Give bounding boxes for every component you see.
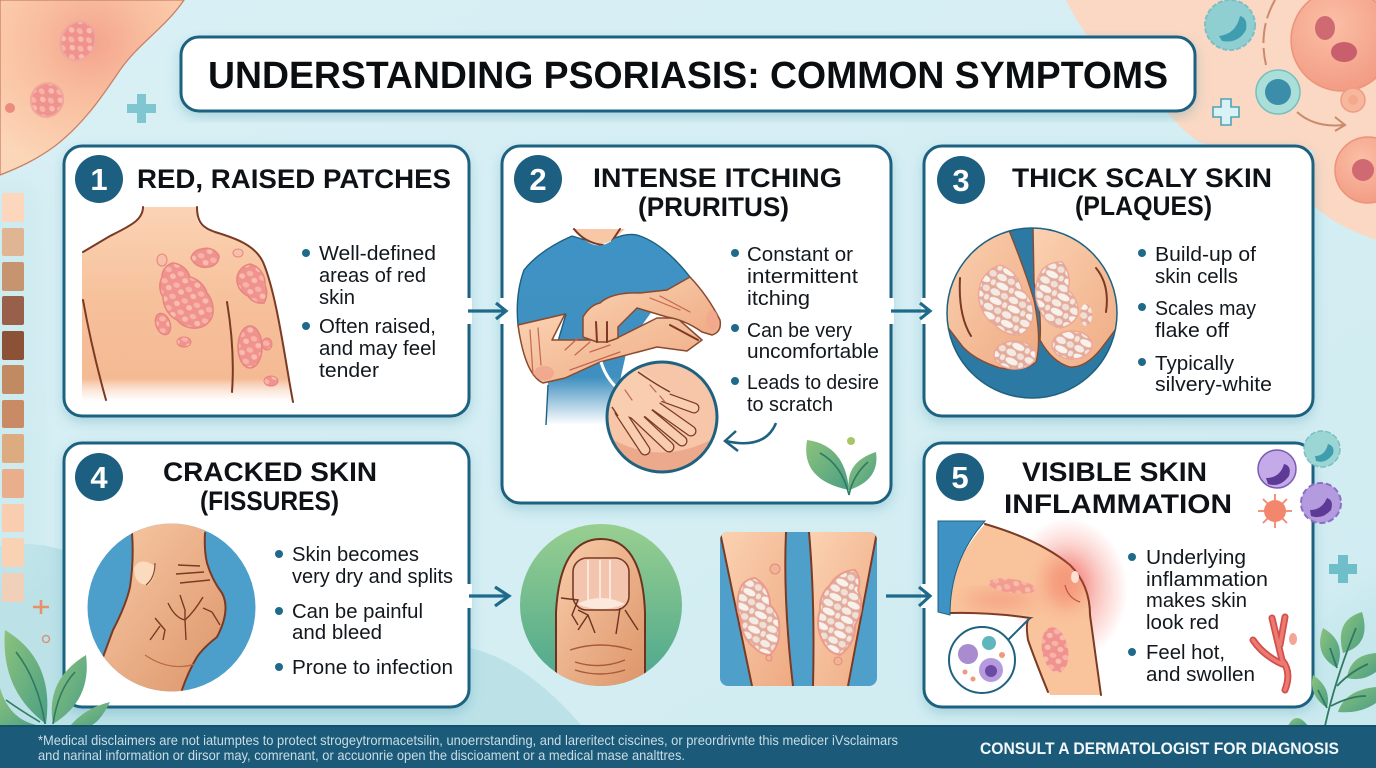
heading 3: THICK SCALY SKIN	[1012, 163, 1272, 193]
icon: purple spiky cell	[1301, 483, 1341, 523]
icon: teal cell	[1304, 431, 1340, 467]
decorative skin cells, top right	[1066, 0, 1376, 240]
bullets 1: skin	[319, 286, 355, 309]
number badge 5	[936, 453, 984, 501]
heading 2: (PRURITUS)	[638, 192, 789, 222]
number badge 5: 5	[951, 460, 969, 495]
illustration: cracked heel	[88, 520, 256, 695]
bullets 5	[1128, 546, 1268, 686]
bullets 3: skin cells	[1155, 265, 1238, 288]
heading 2: INTENSE ITCHING	[593, 163, 842, 193]
heading 3	[1012, 163, 1272, 221]
bullets 3: Build-up of	[1155, 243, 1256, 266]
bullets 4	[275, 543, 453, 679]
title: UNDERSTANDING PSORIASIS: COMMON SYMPTOMS	[208, 55, 1168, 97]
bullets 3: Typically	[1155, 352, 1235, 375]
number badge 4: 4	[90, 460, 108, 495]
bullets 1: areas of red	[319, 264, 426, 287]
heading 5	[1004, 457, 1232, 519]
heading 2	[593, 163, 842, 222]
heading 5: INFLAMMATION	[1004, 489, 1232, 519]
panel 5: visible skin inflammation	[924, 431, 1341, 707]
bullets 2: Constant or	[747, 243, 853, 266]
bullets 4: very dry and splits	[292, 565, 453, 588]
bullets 1: tender	[319, 359, 379, 382]
medical disclaimer text: and narinal information or dirsor may, comrenant, or accuonrie open the discioament or a medical mase analttres.	[38, 747, 685, 763]
icon: virus	[1258, 494, 1292, 528]
bullets 4: and bleed	[292, 621, 382, 644]
number badge 1	[75, 155, 123, 203]
heading 3: (PLAQUES)	[1075, 191, 1212, 221]
bullets 4: Can be painful	[292, 600, 423, 623]
bullets 2: Can be very	[747, 319, 853, 342]
bullets 4: Prone to infection	[292, 656, 453, 679]
skin tone swatches	[2, 193, 24, 602]
bullets 3: silvery-white	[1155, 373, 1272, 396]
icon: leaf sprout	[806, 437, 876, 495]
magnified hand inset	[605, 362, 720, 480]
bullets 5: Underlying	[1146, 546, 1246, 569]
illustration: back with patches	[82, 207, 293, 402]
arrow: panel 4 to nail	[466, 584, 509, 608]
decorative plus, top left	[127, 94, 156, 123]
bullets 4: Skin becomes	[292, 543, 419, 566]
legs illustration	[720, 532, 877, 686]
decorative outlined plus, top right	[1213, 99, 1239, 125]
panel 3: thick scaly skin	[924, 146, 1313, 416]
bullets 3: flake off	[1155, 319, 1229, 342]
inset: inflammatory cells	[949, 618, 1030, 693]
bullets 5: makes skin	[1146, 589, 1247, 612]
bullets 5: inflammation	[1146, 568, 1268, 591]
bullets 1: Well-defined	[319, 242, 436, 265]
decorative leaves, bottom right	[1288, 612, 1376, 726]
panel 2: intense itching	[502, 146, 891, 503]
panel 1: red, raised patches	[64, 146, 469, 416]
number badge 4	[75, 453, 123, 501]
decorative skin close-up, top left	[0, 0, 184, 175]
bullets 2	[731, 243, 879, 416]
footer bar	[0, 725, 1376, 768]
nail illustration	[520, 524, 682, 690]
arrow: legs to panel 5	[886, 584, 930, 608]
illustration: inflamed knee	[938, 518, 1128, 695]
number badge 2	[514, 155, 562, 203]
heading 1: RED, RAISED PATCHES	[137, 164, 451, 194]
icon: purple cell	[1258, 450, 1296, 488]
bullets 1	[302, 242, 436, 382]
decorative orange plus and ring	[33, 600, 50, 642]
bullets 5: Feel hot,	[1146, 641, 1225, 664]
call to action: CONSULT A DERMATOLOGIST FOR DIAGNOSIS	[980, 740, 1339, 758]
decorative plus, right	[1329, 555, 1357, 583]
panel 4: cracked skin	[64, 443, 469, 707]
bullets 5: look red	[1146, 611, 1219, 634]
number badge 3: 3	[952, 163, 970, 198]
bullets 2: uncomfortable	[747, 340, 879, 363]
title	[181, 37, 1195, 111]
number badge 1: 1	[90, 162, 108, 197]
bullets 5: and swollen	[1146, 663, 1255, 686]
bullets 1: Often raised,	[319, 315, 436, 338]
heading 5: VISIBLE SKIN	[1022, 457, 1207, 487]
heading 4	[163, 457, 377, 516]
bullets 1: and may feel	[319, 337, 436, 360]
bullets 2: to scratch	[747, 393, 833, 416]
medical disclaimer text	[38, 732, 898, 763]
heading 4: CRACKED SKIN	[163, 457, 377, 487]
arrow: panel 1 to panel 2	[466, 298, 506, 324]
heading 4: (FISSURES)	[200, 486, 339, 516]
bullets 2: itching	[747, 287, 810, 310]
number badge 2: 2	[529, 162, 547, 197]
medical disclaimer text: *Medical disclaimers are not iatumptes to protect strogeytrormacetsilin, unoerrstanding, and lareritect ciscines, or preordrivnte this medicer iVsclaimars	[38, 732, 898, 748]
illustration: elbows with plaques	[940, 225, 1125, 398]
illustration: person scratching arm	[517, 229, 720, 425]
number badge 3	[937, 156, 985, 204]
curved arrow to inset	[725, 423, 776, 451]
decorative leaves, bottom left	[0, 630, 110, 726]
icon: blood vessel	[1253, 617, 1297, 690]
bullets 2: intermittent	[747, 265, 858, 288]
arrow: panel 2 to panel 3	[888, 298, 930, 324]
bullets 2: Leads to desire	[747, 371, 879, 394]
bullets 3: Scales may	[1155, 297, 1257, 320]
bullets 3	[1138, 243, 1272, 396]
